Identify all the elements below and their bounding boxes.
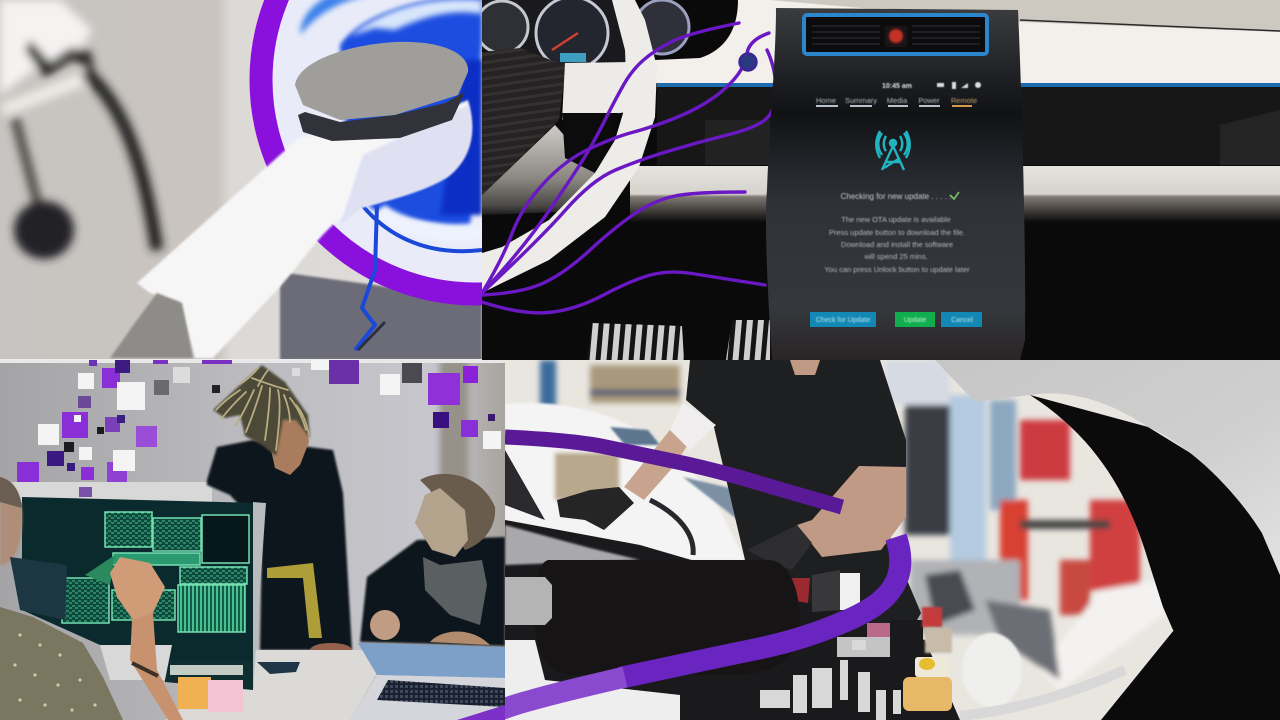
- blurred charger on the left: [0, 0, 157, 259]
- navigation tabs: Media: [887, 96, 908, 105]
- fender and wheel arch: [935, 360, 1280, 720]
- blurred workshop background: [540, 360, 1170, 690]
- hands: [310, 643, 352, 657]
- button: cancel: [941, 312, 982, 327]
- icon: antenna: [876, 131, 910, 170]
- laptop: [350, 643, 505, 720]
- button: update: [895, 312, 935, 327]
- blue trim line: [657, 83, 1280, 87]
- panel: mechanic working on engine photo: [470, 360, 1280, 720]
- icon: purple wires: [482, 23, 776, 313]
- plug head: [295, 42, 468, 120]
- sticky notes: [178, 677, 243, 712]
- fluid bottle: [903, 657, 952, 711]
- blue illuminated socket: [300, 0, 482, 350]
- black engine cover: [535, 560, 800, 675]
- update message: will spend 25 mins.: [863, 252, 928, 261]
- status bar icons: [937, 82, 981, 89]
- update message: Download and install the software: [841, 240, 953, 249]
- arm right: [797, 466, 906, 557]
- white dash strip: [630, 166, 1280, 222]
- engine bay: [505, 520, 960, 720]
- icon: purple ring: [250, 0, 482, 306]
- button: check for update: [810, 312, 876, 327]
- icon: white plug handle: [137, 100, 472, 358]
- hair mass: [213, 365, 310, 456]
- panel: tablet screen: [766, 8, 1025, 360]
- lower hose: [960, 670, 1125, 716]
- silver cylinder: [505, 577, 552, 625]
- navigation tabs: Summary: [845, 96, 877, 105]
- person seated right: [360, 474, 505, 646]
- green dashboards on screen: [62, 512, 249, 632]
- desk: [165, 650, 390, 720]
- icon: check mark: [950, 192, 959, 199]
- upper trim: [770, 0, 1280, 32]
- white upper dash surface: [655, 0, 1280, 83]
- hair strands: [216, 368, 309, 450]
- panel: EV charging plug photo: [0, 0, 482, 359]
- steering wheel: [482, 0, 657, 293]
- update status text: Checking for new update . . . . .: [841, 192, 951, 201]
- status bar time: 10:45 am: [882, 83, 912, 90]
- dark mid dash: [657, 87, 1280, 165]
- gloves: [557, 487, 634, 530]
- icon: purple ribbon: [470, 437, 900, 720]
- belt: [267, 563, 322, 638]
- button: cancel: Cancel: [951, 317, 973, 324]
- navigation tabs: Remote: [951, 96, 977, 105]
- plug collar: [110, 293, 193, 358]
- pedals: [587, 320, 770, 360]
- update message: You can press Unlock button to update later: [824, 265, 970, 274]
- navigation tabs: Power: [918, 96, 940, 105]
- update message: [824, 215, 970, 274]
- grey column behind wheel: [482, 125, 597, 215]
- white car hood: [505, 403, 745, 560]
- monitor: [22, 497, 266, 690]
- white ledge behind monitor: [10, 482, 212, 502]
- pixel squares: [17, 360, 501, 497]
- white tanks: [505, 640, 680, 720]
- face: [270, 417, 309, 475]
- person standing: [207, 365, 352, 657]
- panel: team at monitor photo: [0, 360, 505, 720]
- update message: The new OTA update is available: [841, 215, 951, 224]
- navigation tabs: Home: [816, 96, 836, 105]
- button: update: Update: [904, 317, 926, 324]
- desk gadgets: [257, 662, 300, 674]
- person foreground left: [0, 477, 183, 720]
- thin divider under top row: [0, 359, 482, 360]
- instrument cluster: [476, 0, 689, 69]
- tab underlines: [816, 105, 972, 107]
- air vent: [804, 15, 987, 54]
- navigation tabs: [816, 96, 977, 105]
- white pulley disc: [962, 633, 1022, 707]
- mechanic: [557, 360, 921, 650]
- arm left: [624, 420, 700, 500]
- dark seam line: [1020, 20, 1280, 31]
- update message: Press update button to download the file.: [829, 228, 965, 237]
- button: check for update: Check for Update: [816, 317, 870, 324]
- panel: car dashboard with OTA update screen: [476, 0, 1280, 360]
- bottom right grey base: [280, 272, 482, 360]
